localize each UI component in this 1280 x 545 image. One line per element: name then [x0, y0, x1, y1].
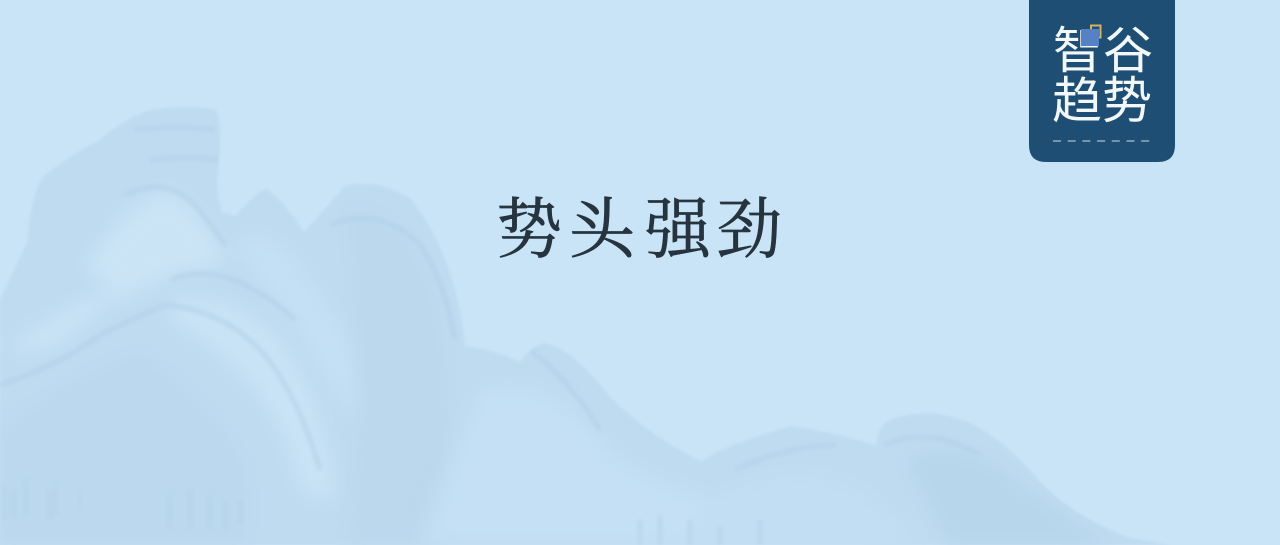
pale mist, lower left shoulder [45, 322, 66, 337]
right peak shade [367, 398, 380, 421]
pale hills, centre [438, 516, 448, 531]
pale central slope [232, 236, 395, 440]
pale arched slope [182, 309, 323, 484]
logo badge [1029, 0, 1175, 162]
logo text: 势 [1102, 73, 1152, 129]
misty tree lines [5, 478, 760, 545]
logo text: 趋 [1052, 73, 1102, 129]
title: 势 [496, 194, 562, 267]
logo text: 谷 [1103, 23, 1153, 79]
lower left shade [0, 350, 250, 545]
badge background [1029, 0, 1175, 162]
pale foothill [680, 475, 930, 545]
ink strata [156, 187, 320, 468]
shading and mist clipped to the silhouette [45, 199, 976, 484]
dashed rule [1053, 140, 1150, 142]
title [496, 194, 782, 267]
title: 强 [645, 194, 713, 267]
mountain landscape [0, 107, 1172, 545]
logo accent squares [1081, 26, 1100, 46]
title: 头 [569, 194, 636, 267]
pale mist, upper left massif [97, 199, 212, 286]
title: 劲 [716, 194, 782, 267]
logo text [1052, 23, 1153, 129]
logo text: 智 [1053, 23, 1103, 79]
far mountain silhouette [0, 107, 1172, 545]
far right peak shade [905, 450, 1110, 545]
